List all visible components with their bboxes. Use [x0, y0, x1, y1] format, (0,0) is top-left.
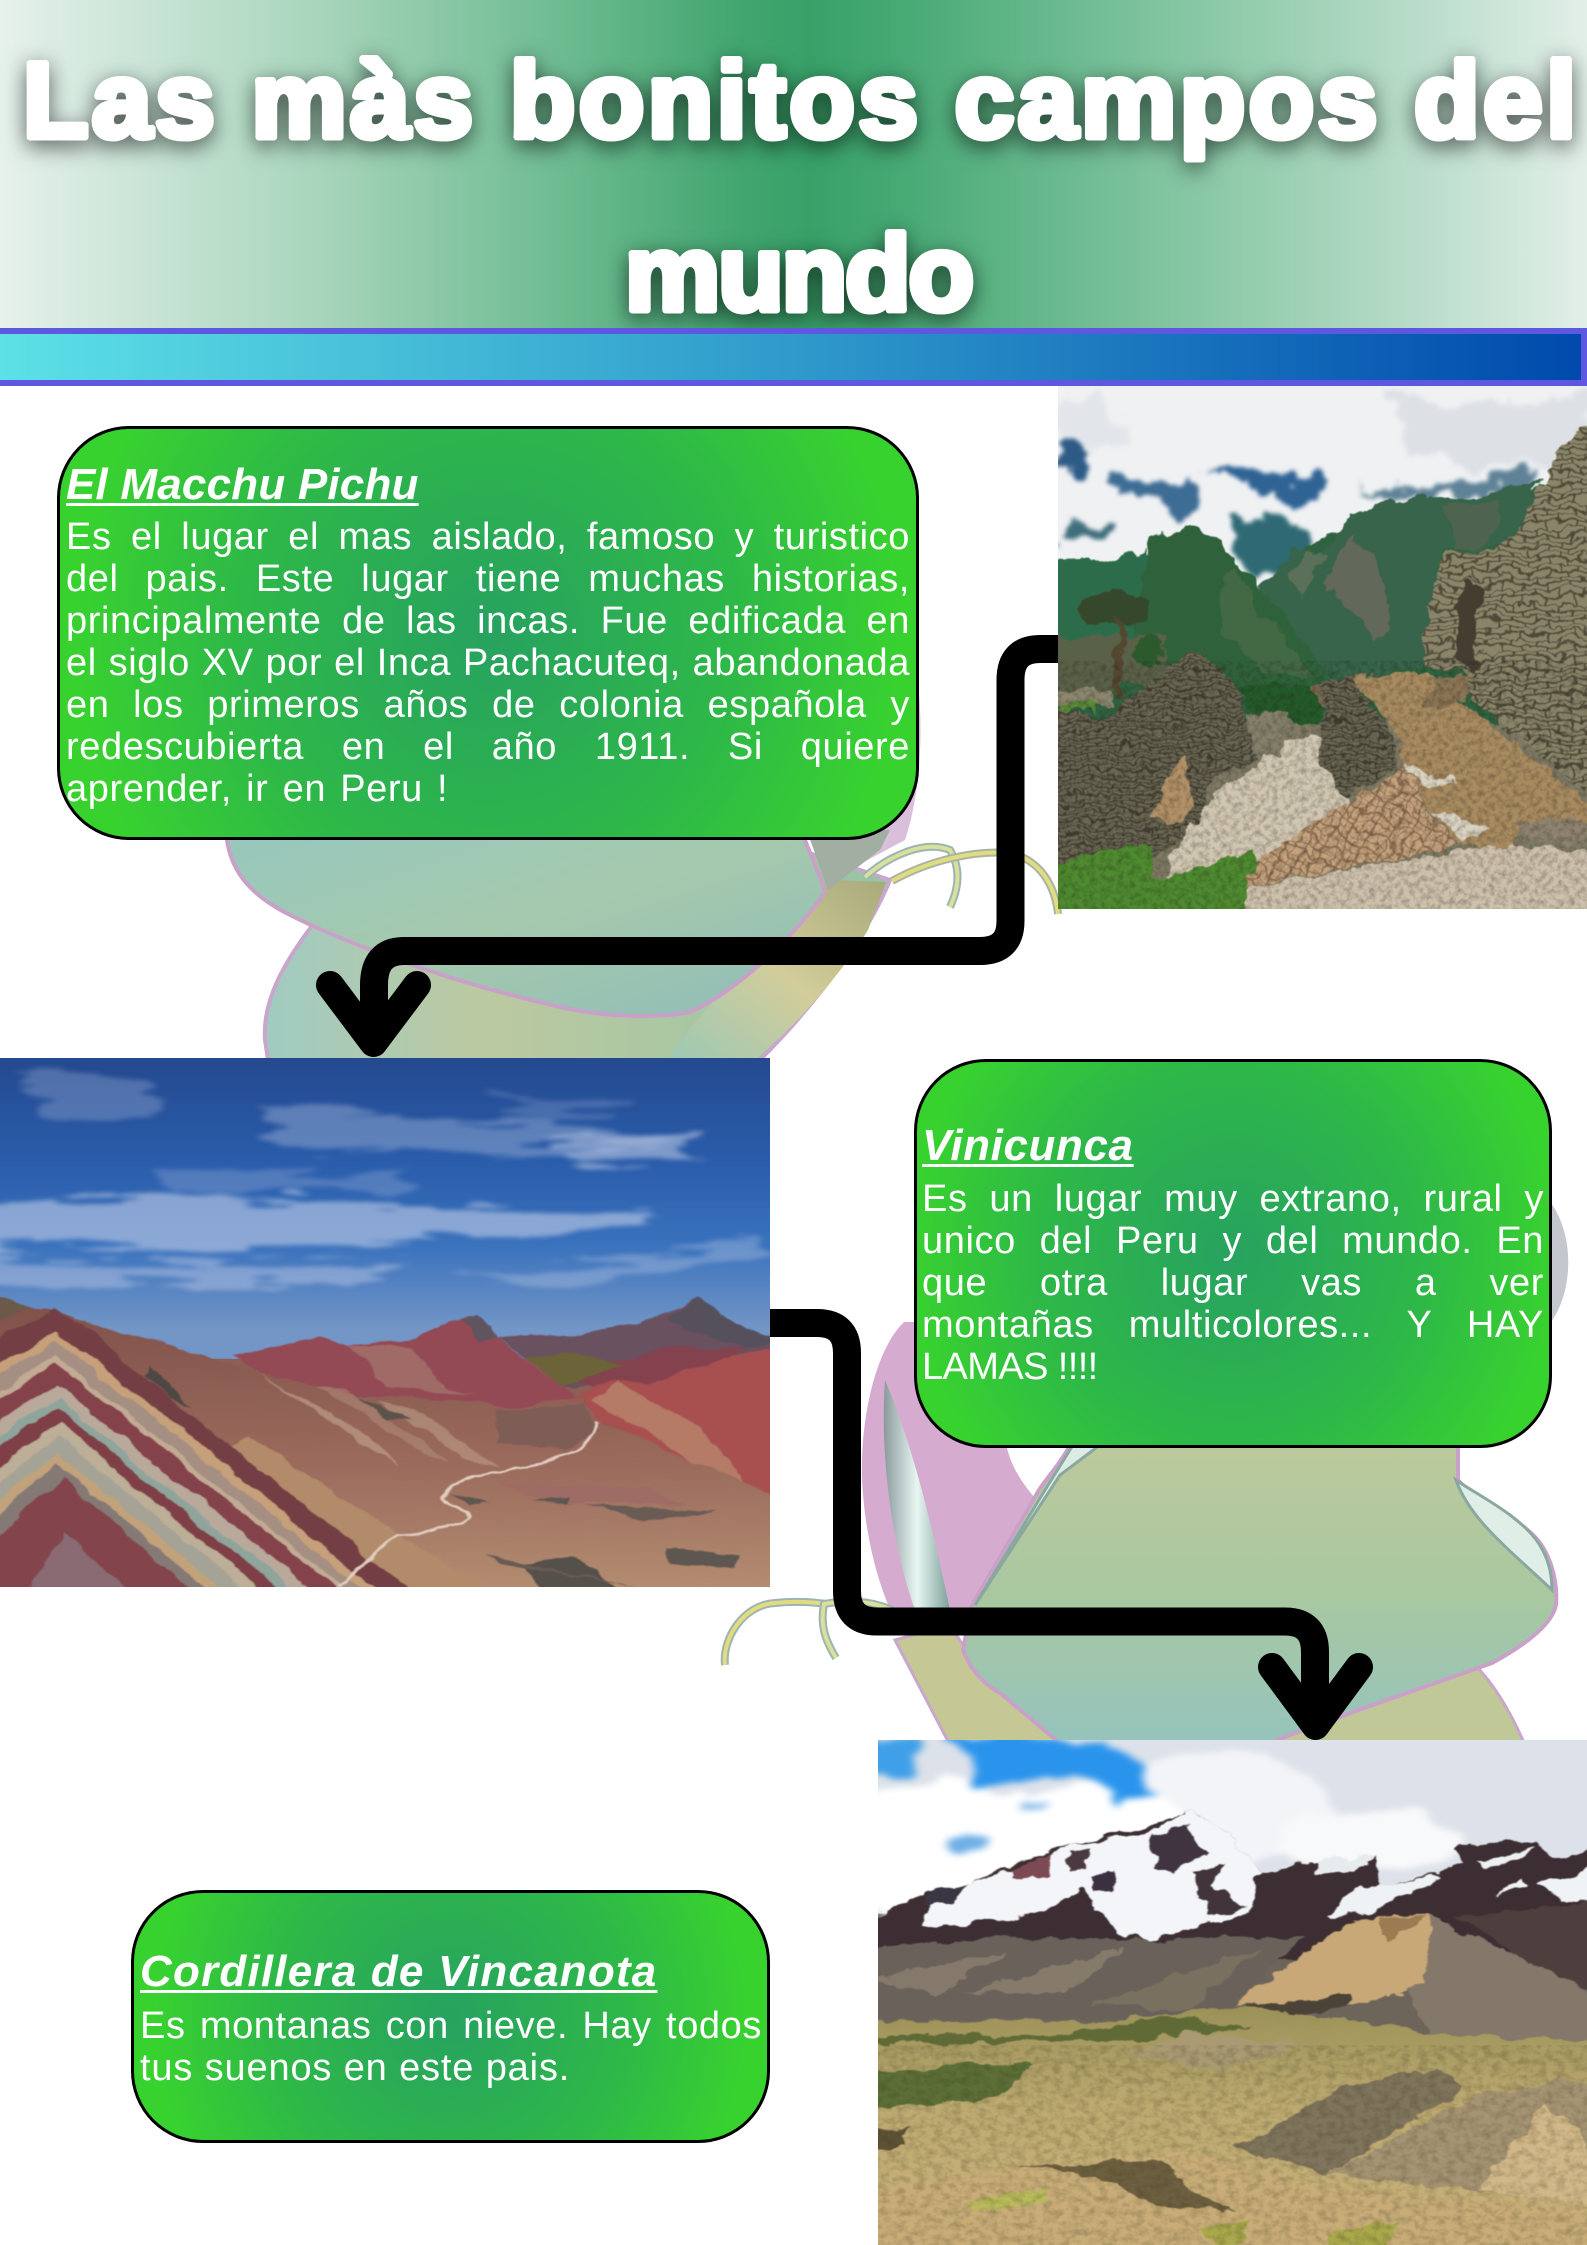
body text [140, 2005, 762, 2089]
card background [57, 426, 919, 840]
body text: montañas multicolores... Y HAY [922, 1304, 1544, 1346]
body text: tus suenos en este pais. [140, 2047, 570, 2089]
body text [66, 516, 910, 810]
body text: principalmente de las incas. Fue edificada en [66, 600, 910, 642]
photo: Cordillera de Vilcanota [878, 1740, 1587, 2245]
photo: Machu Picchu [1058, 386, 1587, 909]
body text: Es montanas con nieve. Hay todos [140, 2005, 762, 2047]
header band [0, 0, 1587, 328]
body text: LAMAS !!!! [922, 1346, 1098, 1388]
body text: aprender, ir en Peru ! [66, 768, 448, 810]
card: Cordillera de Vincanota [131, 1890, 770, 2143]
heading: Cordillera de Vincanota [140, 1947, 657, 1996]
body text: el siglo XV por el Inca Pachacuteq, abandonada [66, 642, 910, 684]
gradient divider bar [0, 328, 1587, 386]
iridescent blob behind first card [225, 694, 1062, 1058]
arrow: Vinicunca to Cordillera [770, 1309, 1373, 1740]
body text: Es el lugar el mas aislado, famoso y turistico [66, 516, 910, 558]
card: El Macchu Pichu [57, 426, 919, 840]
body text: en los primeros años de colonia española y [66, 684, 910, 726]
arrow: Machu Picchu to Vinicunca [316, 635, 1058, 1057]
body text: unico del Peru y del mundo. En [922, 1220, 1544, 1262]
title: Las màs bonitos campos del [23, 40, 1576, 160]
card background [131, 1890, 770, 2143]
photo: Vinicunca rainbow mountain [0, 1058, 770, 1587]
heading: Vinicunca [922, 1121, 1134, 1170]
card background [914, 1059, 1552, 1448]
body text: que otra lugar vas a ver [922, 1262, 1544, 1304]
body text: del pais. Este lugar tiene muchas historias, [66, 558, 910, 600]
iridescent blob behind second card [720, 1204, 1568, 1740]
title [10, 40, 1587, 328]
heading: El Macchu Pichu [66, 460, 419, 509]
body text [922, 1178, 1544, 1388]
body text: Es un lugar muy extrano, rural y [922, 1178, 1544, 1220]
card: Vinicunca [914, 1059, 1552, 1448]
body text: redescubierta en el año 1911. Si quiere [66, 726, 910, 768]
